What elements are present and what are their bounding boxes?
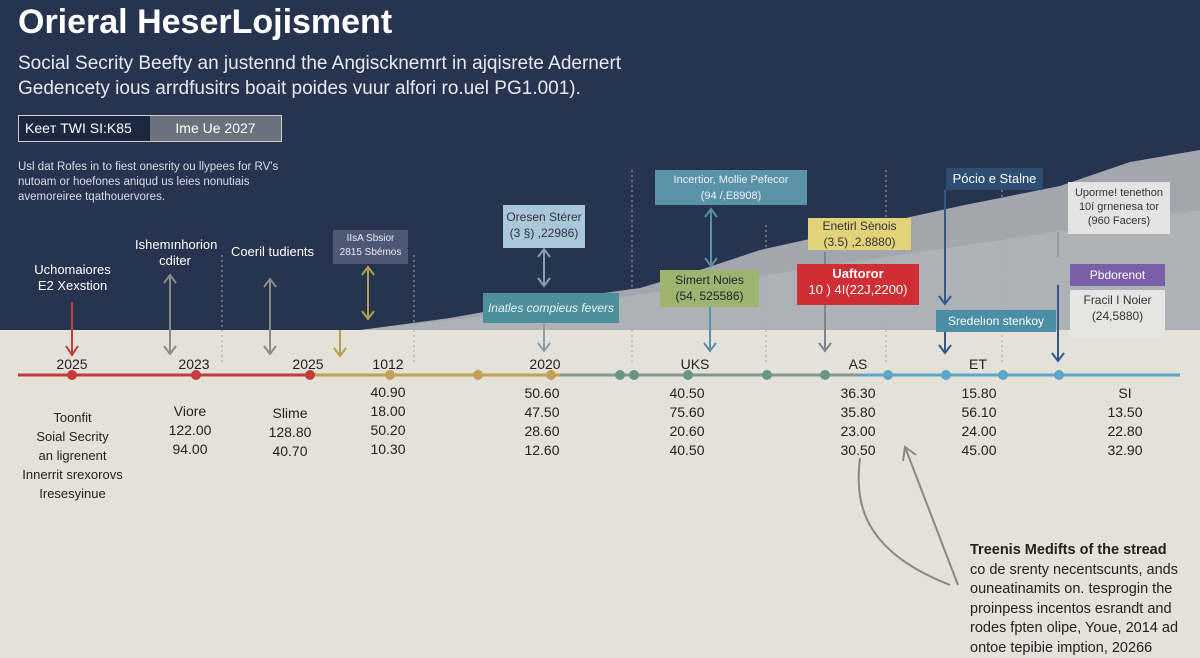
values: Soial Secrity <box>36 429 109 444</box>
text: 18.00 <box>370 403 406 419</box>
text: 94.00 <box>172 441 208 457</box>
text: Oresen Stérer <box>506 210 582 224</box>
values: an ligrenent <box>39 448 106 463</box>
text: 56.10 <box>961 404 997 420</box>
text: 30.50 <box>840 442 876 458</box>
text: (54, 525586) <box>675 289 744 303</box>
text: Uporme! tenethon <box>1075 187 1163 199</box>
text: 36.30 <box>840 385 876 401</box>
note text <box>970 542 1178 656</box>
text: Incertior, Mollie Pefecor <box>674 174 788 186</box>
text: 40.70 <box>272 443 308 459</box>
text: (960 Facers) <box>1088 215 1150 227</box>
text: Pbdorenot <box>1090 268 1145 282</box>
text: 2025 <box>292 356 324 372</box>
text: 75.60 <box>669 404 705 420</box>
note text: rodes fpten olipe, Youe, 2014 ad <box>970 620 1178 636</box>
intro text: avemoreiree tqathouervores. <box>18 191 165 203</box>
arrows <box>66 190 1064 585</box>
text: 50.20 <box>370 422 406 438</box>
title: Orieral HeserLojisment <box>18 3 392 41</box>
text: (3.5) ,2.8880) <box>823 235 896 249</box>
text: 47.50 <box>524 404 560 420</box>
text: ET <box>969 356 987 372</box>
note text: co de srenty necentscunts, ands <box>970 562 1178 578</box>
text: 10í grnenesa tor <box>1079 201 1159 213</box>
text: IIsA Sbsior <box>347 233 394 244</box>
text: Slime <box>272 405 308 421</box>
text: 28.60 <box>524 423 560 439</box>
text: Enetirl Sènois <box>822 219 897 233</box>
text: (94 /,E8908) <box>701 190 761 202</box>
values <box>22 410 123 501</box>
labels: E2 Xexstion <box>38 278 107 293</box>
text: Uaftoror <box>832 266 884 281</box>
text: 40.50 <box>669 385 705 401</box>
text: Simert Noies <box>675 273 744 287</box>
labels: Uchomaiores <box>34 262 111 277</box>
text: SI <box>1118 385 1132 401</box>
text: AS <box>849 356 867 372</box>
text: 50.60 <box>524 385 560 401</box>
text: (3 §) ,22986) <box>510 226 578 240</box>
intro text: nutoam or hoefones aniqud us leies nonutiais <box>18 176 249 188</box>
text: Inatles compieus fevers <box>488 301 614 315</box>
text: 13.50 <box>1107 404 1143 420</box>
subtitle <box>18 53 621 99</box>
intro text <box>18 161 278 203</box>
text: (24,5880) <box>1092 309 1143 323</box>
text: Pócio e Stalne <box>953 171 1036 186</box>
key box <box>18 115 282 142</box>
subtitle: Gedencety ious arrdfusitrs boait poides vuur alfori ro.uel PG1.001). <box>18 78 581 99</box>
text: 40.50 <box>669 442 705 458</box>
key box: Ime Ue 2027 <box>175 120 256 136</box>
text: 20.60 <box>669 423 705 439</box>
text: Viore <box>174 403 206 419</box>
text: 24.00 <box>961 423 997 439</box>
labels <box>34 262 111 293</box>
text: 45.00 <box>961 442 997 458</box>
text: 15.80 <box>961 385 997 401</box>
text: Ishemınhorion <box>135 237 217 252</box>
text: Sredelıon stenkoy <box>948 314 1044 328</box>
values: Innerrit srexorovs <box>22 467 123 482</box>
text: Fracil I Noier <box>1083 293 1152 307</box>
key box: Keeт TWI SI:K85 <box>25 120 132 136</box>
text: 12.60 <box>524 442 560 458</box>
text: 2815 Sbémos <box>340 247 401 258</box>
note text: proinpess incentos esrandt and <box>970 600 1172 616</box>
text: cditer <box>159 253 191 268</box>
text: 128.80 <box>269 424 311 440</box>
values: Toonfit <box>53 410 92 425</box>
text: 2020 <box>529 356 561 372</box>
text: 40.90 <box>370 384 406 400</box>
text: Coeril tudients <box>231 244 314 259</box>
text: 122.00 <box>169 422 211 438</box>
note text: ontoe tepibie imption, 20266 <box>970 640 1152 656</box>
intro text: Usl dat Rofes in to fiest onesrity ou llypees for RV's <box>18 161 278 173</box>
text: 22.80 <box>1107 423 1143 439</box>
years: 2025 <box>56 356 88 372</box>
note text: ouneatinamits on. tesprogin the <box>970 581 1172 597</box>
text: 35.80 <box>840 404 876 420</box>
subtitle: Social Secrity Beefty an justennd the Angiscknemrt in ajqisrete Adernert <box>18 53 621 74</box>
text: 10 ) 4I(22J,2200) <box>808 282 908 297</box>
text: 2023 <box>178 356 210 372</box>
values: Iresesyinue <box>39 486 106 501</box>
text: 1012 <box>372 356 404 372</box>
text: 10.30 <box>370 441 406 457</box>
text: UKS <box>681 356 709 372</box>
text: 32.90 <box>1107 442 1143 458</box>
text: 23.00 <box>840 423 876 439</box>
note text: Treenis Medifts of the stread <box>970 542 1167 558</box>
